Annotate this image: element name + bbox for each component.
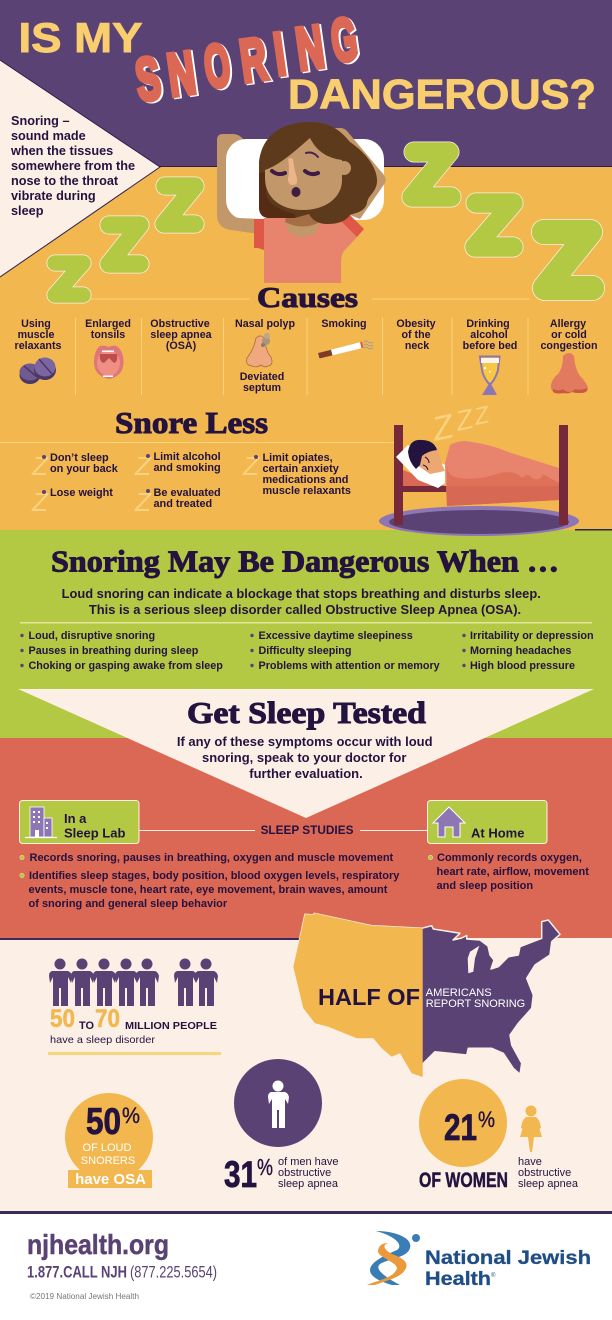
at home list: and sleep position (436, 880, 533, 892)
stat: 50 to 70 million: 70 (95, 1005, 120, 1033)
background: red section (0, 738, 612, 938)
cause: drinking alcohol: alcohol (470, 329, 508, 341)
sleep lab list: events, muscle tone, heart rate, eye movement, brain waves, amount (28, 884, 388, 896)
cause: drinking alcohol: Drinking (466, 318, 510, 330)
icon: cigarette (318, 341, 373, 358)
pillow (396, 445, 445, 488)
icon: mouth (94, 346, 124, 379)
title word: snoring: S (134, 46, 167, 115)
at home list (428, 852, 592, 892)
stat: 31 percent of men: sleep apnea (278, 1178, 339, 1190)
get tested text: If any of these symptoms occur with loud (177, 734, 433, 749)
stat: 50 to 70 million: 50 (50, 1005, 75, 1033)
title word: snoring: I (272, 22, 291, 89)
symptoms list: Excessive daytime sleepiness (258, 630, 413, 642)
sleep lab list (20, 852, 403, 910)
cause: allergy or cold: or cold (551, 329, 587, 341)
get sleep tested triangle (18, 689, 594, 818)
definition text: nose to the throat (11, 174, 119, 188)
at home list: heart rate, airflow, movement (436, 866, 589, 878)
stat: 50 percent: % (122, 1103, 140, 1128)
snore less bullets: Lose weight (50, 487, 113, 499)
cause: muscle relaxants: muscle (18, 329, 54, 341)
national jewish health logo: National Jewish (425, 1247, 591, 1269)
cause: smoking (318, 318, 373, 358)
head (417, 447, 445, 474)
symptoms list: Morning headaches (470, 645, 571, 657)
definition text: somewhere from the (11, 159, 135, 173)
snore less bullets: and treated (154, 498, 212, 510)
box: in a sleep lab: In a (64, 811, 87, 826)
map text: half of americans report snoring: REPORT SNORING (426, 998, 525, 1010)
people icons (49, 958, 218, 1006)
snore less bullets: certain anxiety (262, 463, 339, 475)
title word: snoring: O (202, 33, 236, 103)
zzz: Z (452, 403, 477, 437)
title word: snoring: N (163, 39, 199, 109)
title word: snoring: R (236, 26, 271, 95)
box: at home (428, 800, 547, 844)
snore less bullets: on your back (50, 463, 119, 475)
logo helix (367, 1231, 420, 1285)
definition text: Snoring – (11, 114, 70, 128)
snore less background z marks (31, 451, 260, 517)
title: IS MY (18, 14, 142, 61)
rug (379, 506, 579, 536)
box: in a sleep lab (20, 800, 139, 844)
shirt (264, 218, 357, 283)
snore less bullets: Don’t sleep (50, 452, 109, 464)
snore less bullets: medications and (262, 474, 348, 486)
stat: 50 to 70 million: have a sleep disorder (50, 1034, 156, 1046)
cause: smoking: Smoking (321, 318, 367, 330)
icon: man (268, 1080, 289, 1128)
get tested text: further evaluation. (249, 766, 363, 781)
stat: 21 percent of women (419, 1079, 579, 1192)
icon: building (25, 807, 57, 838)
background: purple header (0, 0, 612, 167)
symptoms list (20, 630, 597, 672)
stat: 31 percent of men (224, 1059, 339, 1195)
cause: drinking alcohol (463, 318, 517, 395)
snore less bullets: and smoking (154, 462, 221, 474)
background: white footer (0, 1214, 612, 1320)
title: DANGEROUS? (288, 70, 596, 118)
cause: muscle relaxants (15, 318, 62, 384)
footer contact (27, 1229, 217, 1301)
snore less bullets: Limit opiates, (262, 452, 333, 464)
cause: allergy or cold: Allergy (550, 318, 586, 330)
causes dividers (76, 318, 528, 395)
stat: 50 percent: SNORERS (81, 1155, 135, 1167)
symptoms list: Pauses in breathing during sleep (28, 645, 199, 657)
cause: nasal polyp and deviated septum: Nasal polyp (235, 318, 295, 330)
map text: half of americans report snoring (318, 984, 525, 1010)
background: green section (0, 530, 612, 738)
cause: allergy or cold: congestion (540, 340, 598, 352)
dangerous intro text: Loud snoring can indicate a blockage that stops breathing and disturbs sleep. (62, 586, 541, 601)
cause: nasal polyp and deviated septum: septum (243, 382, 281, 394)
icon: house (433, 807, 465, 837)
symptoms list: High blood pressure (470, 660, 575, 672)
dangerous intro text: This is a serious sleep disorder called Obstructive Sleep Apnea (OSA). (89, 602, 521, 617)
stat: 50 percent: have OSA (75, 1171, 146, 1188)
cause: obesity of the neck: neck (405, 340, 429, 352)
stat: 21 percent of women: sleep apnea (518, 1178, 579, 1190)
snore less bullets: Limit alcohol (154, 451, 221, 463)
face (265, 138, 342, 210)
stat: 21 percent of women: obstructive (518, 1167, 571, 1179)
background: cream section (0, 938, 612, 1212)
zzz: Z (428, 407, 458, 449)
definition text: sound made (11, 129, 86, 143)
national jewish health logo: Health (425, 1268, 491, 1290)
national jewish health logo (367, 1231, 591, 1290)
box: at home: At Home (471, 826, 524, 840)
snore less background z marks: Z (242, 451, 260, 481)
snore less background z marks: Z (134, 487, 152, 517)
definition text: when the tissues (10, 144, 113, 158)
cause: muscle relaxants: Using (21, 318, 51, 330)
title (18, 6, 596, 118)
neck (286, 222, 319, 237)
snore less background z marks: Z (31, 451, 49, 481)
heading: causes: Causes (257, 282, 358, 314)
map text: half of americans report snoring: AMERICANS (426, 987, 492, 999)
cause: obstructive sleep apnea: sleep apnea (150, 329, 213, 341)
sleeping woman illustration (217, 122, 386, 283)
lake michigan (468, 946, 479, 973)
cause: enlarged tonsils (85, 318, 131, 379)
background: yellow section (0, 167, 612, 530)
title word: snoring: G (329, 7, 363, 77)
footer contact: (877.225.5654) (130, 1264, 217, 1282)
cause: drinking alcohol: before bed (463, 340, 517, 352)
cause: obesity of the neck: Obesity (396, 318, 436, 330)
stat: 31 percent of men: obstructive (278, 1167, 331, 1179)
title word: snoring (132, 6, 363, 115)
stat: 31 percent of men: of men have (278, 1156, 339, 1168)
footer contact: 1.877.CALL NJH (27, 1264, 127, 1282)
heading: snoring may be dangerous: Snoring May Be Dangerous When … (51, 544, 559, 578)
cause: allergy or cold (540, 318, 598, 394)
definition triangle (0, 60, 160, 277)
snore less background z marks: Z (134, 451, 152, 481)
stat: 21 percent of women: % (478, 1107, 495, 1132)
snore less background z marks: Z (31, 487, 49, 517)
get tested text: snoring, speak to your doctor for (202, 750, 406, 765)
definition text: sleep (11, 204, 44, 218)
sleep lab list: Identifies sleep stages, body position, blood oxygen levels, respiratory (29, 870, 400, 882)
stat: 50 percent (65, 1093, 153, 1188)
icon: woman (520, 1106, 542, 1152)
sleep studies connector: SLEEP STUDIES (261, 823, 354, 837)
stat: 21 percent of women: 21 (444, 1107, 477, 1148)
icon: nose with polyp (247, 333, 272, 367)
map text: half of americans report snoring: HALF OF (318, 984, 420, 1010)
sleeping man in bed illustration (379, 401, 579, 536)
cause: enlarged tonsils: Enlarged (85, 318, 131, 330)
symptoms list: Choking or gasping awake from sleep (28, 660, 223, 672)
icon: nose (551, 353, 588, 394)
snore less bullets (42, 451, 351, 510)
snoring z letters right (412, 152, 592, 288)
stat: 31 percent of men: 31 (224, 1154, 257, 1195)
symptoms list: Problems with attention or memory (258, 660, 440, 672)
cause: enlarged tonsils: tonsils (91, 329, 125, 341)
footer contact: njhealth.org (27, 1229, 169, 1260)
snore less bullets: Be evaluated (154, 487, 221, 499)
title word: snoring: N (292, 13, 328, 83)
title word: snoring: N (165, 40, 201, 110)
stat: 50 to 70 million: TO (79, 1020, 94, 1032)
title word: snoring: O (200, 32, 234, 102)
zzz: Z (471, 401, 493, 431)
sleep lab list: of snoring and general sleep behavior (28, 898, 228, 910)
title word: snoring: N (294, 14, 330, 84)
cause: obstructive sleep apnea: (OSA) (166, 340, 197, 352)
definition text: vibrate during (11, 189, 96, 203)
stat: 50 percent: OF LOUD (83, 1142, 131, 1154)
cause: muscle relaxants: relaxants (15, 340, 62, 352)
snore less bullets: muscle relaxants (262, 485, 351, 497)
snoring z letters left (55, 186, 195, 295)
heading: get sleep tested: Get Sleep Tested (187, 695, 426, 730)
at home list: Commonly records oxygen, (437, 852, 582, 864)
hair (259, 122, 377, 224)
symptoms list: Loud, disruptive snoring (28, 630, 155, 642)
icon: pills (20, 358, 56, 384)
blanket (445, 441, 559, 506)
map of united states (293, 913, 560, 1077)
national jewish health logo: ® (491, 1272, 496, 1279)
cause: obstructive sleep apnea: Obstructive (150, 318, 210, 330)
stat: 50 to 70 million: MILLION PEOPLE (125, 1020, 217, 1032)
stat: 21 percent of women: OF WOMEN (419, 1169, 508, 1192)
cause: nasal polyp and deviated septum: Deviated (240, 371, 284, 383)
icon: glass (480, 356, 500, 395)
stat: 50 to 70 million (48, 1005, 221, 1055)
bed frame (394, 425, 403, 525)
heading: snore less: Snore Less (115, 405, 268, 440)
stat: 50 percent: 50 (86, 1101, 121, 1142)
sleep lab list: Records snoring, pauses in breathing, oxygen and muscle movement (30, 852, 394, 864)
symptoms list: Difficulty sleeping (258, 645, 352, 657)
title word: snoring: G (327, 6, 361, 76)
zzz (428, 401, 493, 449)
cause: obesity of the neck: of the (401, 329, 431, 341)
cause: nasal polyp and deviated septum (235, 318, 295, 394)
footer contact: ©2019 National Jewish Health (30, 1292, 139, 1301)
stat: 31 percent of men: % (257, 1154, 273, 1180)
box: in a sleep lab: Sleep Lab (64, 826, 125, 840)
title word: snoring: S (132, 45, 165, 114)
symptoms list: Irritability or depression (470, 630, 594, 642)
title word: snoring: I (270, 21, 289, 88)
title word: snoring: R (238, 27, 273, 96)
stat: 21 percent of women: have (518, 1156, 542, 1168)
